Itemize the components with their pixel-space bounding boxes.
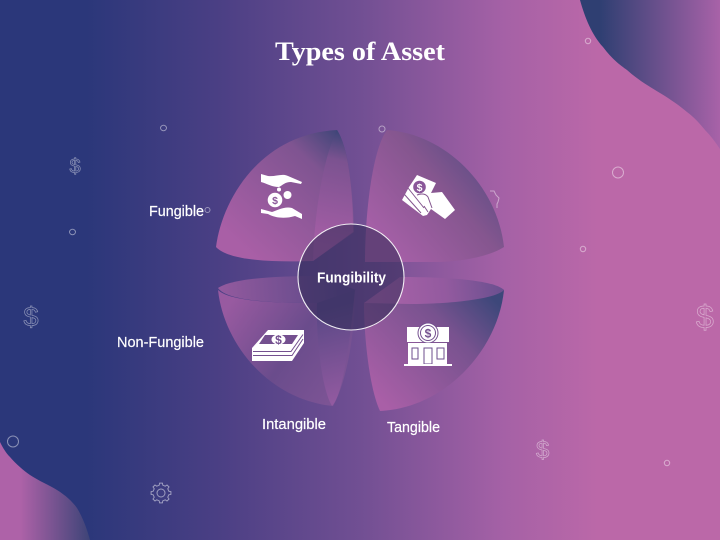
center circle: Fungibility: Fungibility [317,270,387,286]
sector: bottom left (Intangible) [218,276,356,406]
icon: hands with coins [261,174,302,219]
rim of bottom left sector [218,276,356,303]
decorative dollar signs [24,156,714,464]
icon: stack of money: $ [275,333,282,347]
icon: hand holding banknotes: $ [417,182,423,194]
icon: storefront with dollar coin [404,323,452,366]
center circle: Fungibility [298,224,404,330]
icon: stack of money [252,330,304,361]
decorative dollar signs: $ [696,299,714,335]
icon: hands with coins: $ [272,195,278,207]
decorative dollar signs: $ [24,302,39,332]
corner wave: bottom left [0,442,90,540]
sector: top left (Fungible) [216,130,354,261]
title: Types of Asset [275,37,445,66]
sector: top right (assets held) [365,130,504,262]
icon: storefront with dollar coin: $ [425,326,432,340]
icon: hand holding banknotes [402,175,455,219]
decorative dollar signs: $ [70,156,81,178]
label: Non-Fungible: Non-Fungible [117,334,204,351]
decorative bubbles [8,38,670,466]
label: Tangible: Tangible [387,419,440,436]
sector: bottom right (Tangible) [364,277,504,411]
cut face of top left sector [313,130,353,261]
icon: partial gear behind top right sector [490,191,499,208]
cut face of bottom left sector [317,290,355,406]
icon: gear bottom left [151,483,171,503]
decorative dollar signs: $ [536,437,549,464]
rim of bottom right sector [364,277,504,304]
label: Fungible: Fungible [149,203,204,220]
corner wave: top right [580,0,720,149]
label: Intangible: Intangible [262,416,326,433]
